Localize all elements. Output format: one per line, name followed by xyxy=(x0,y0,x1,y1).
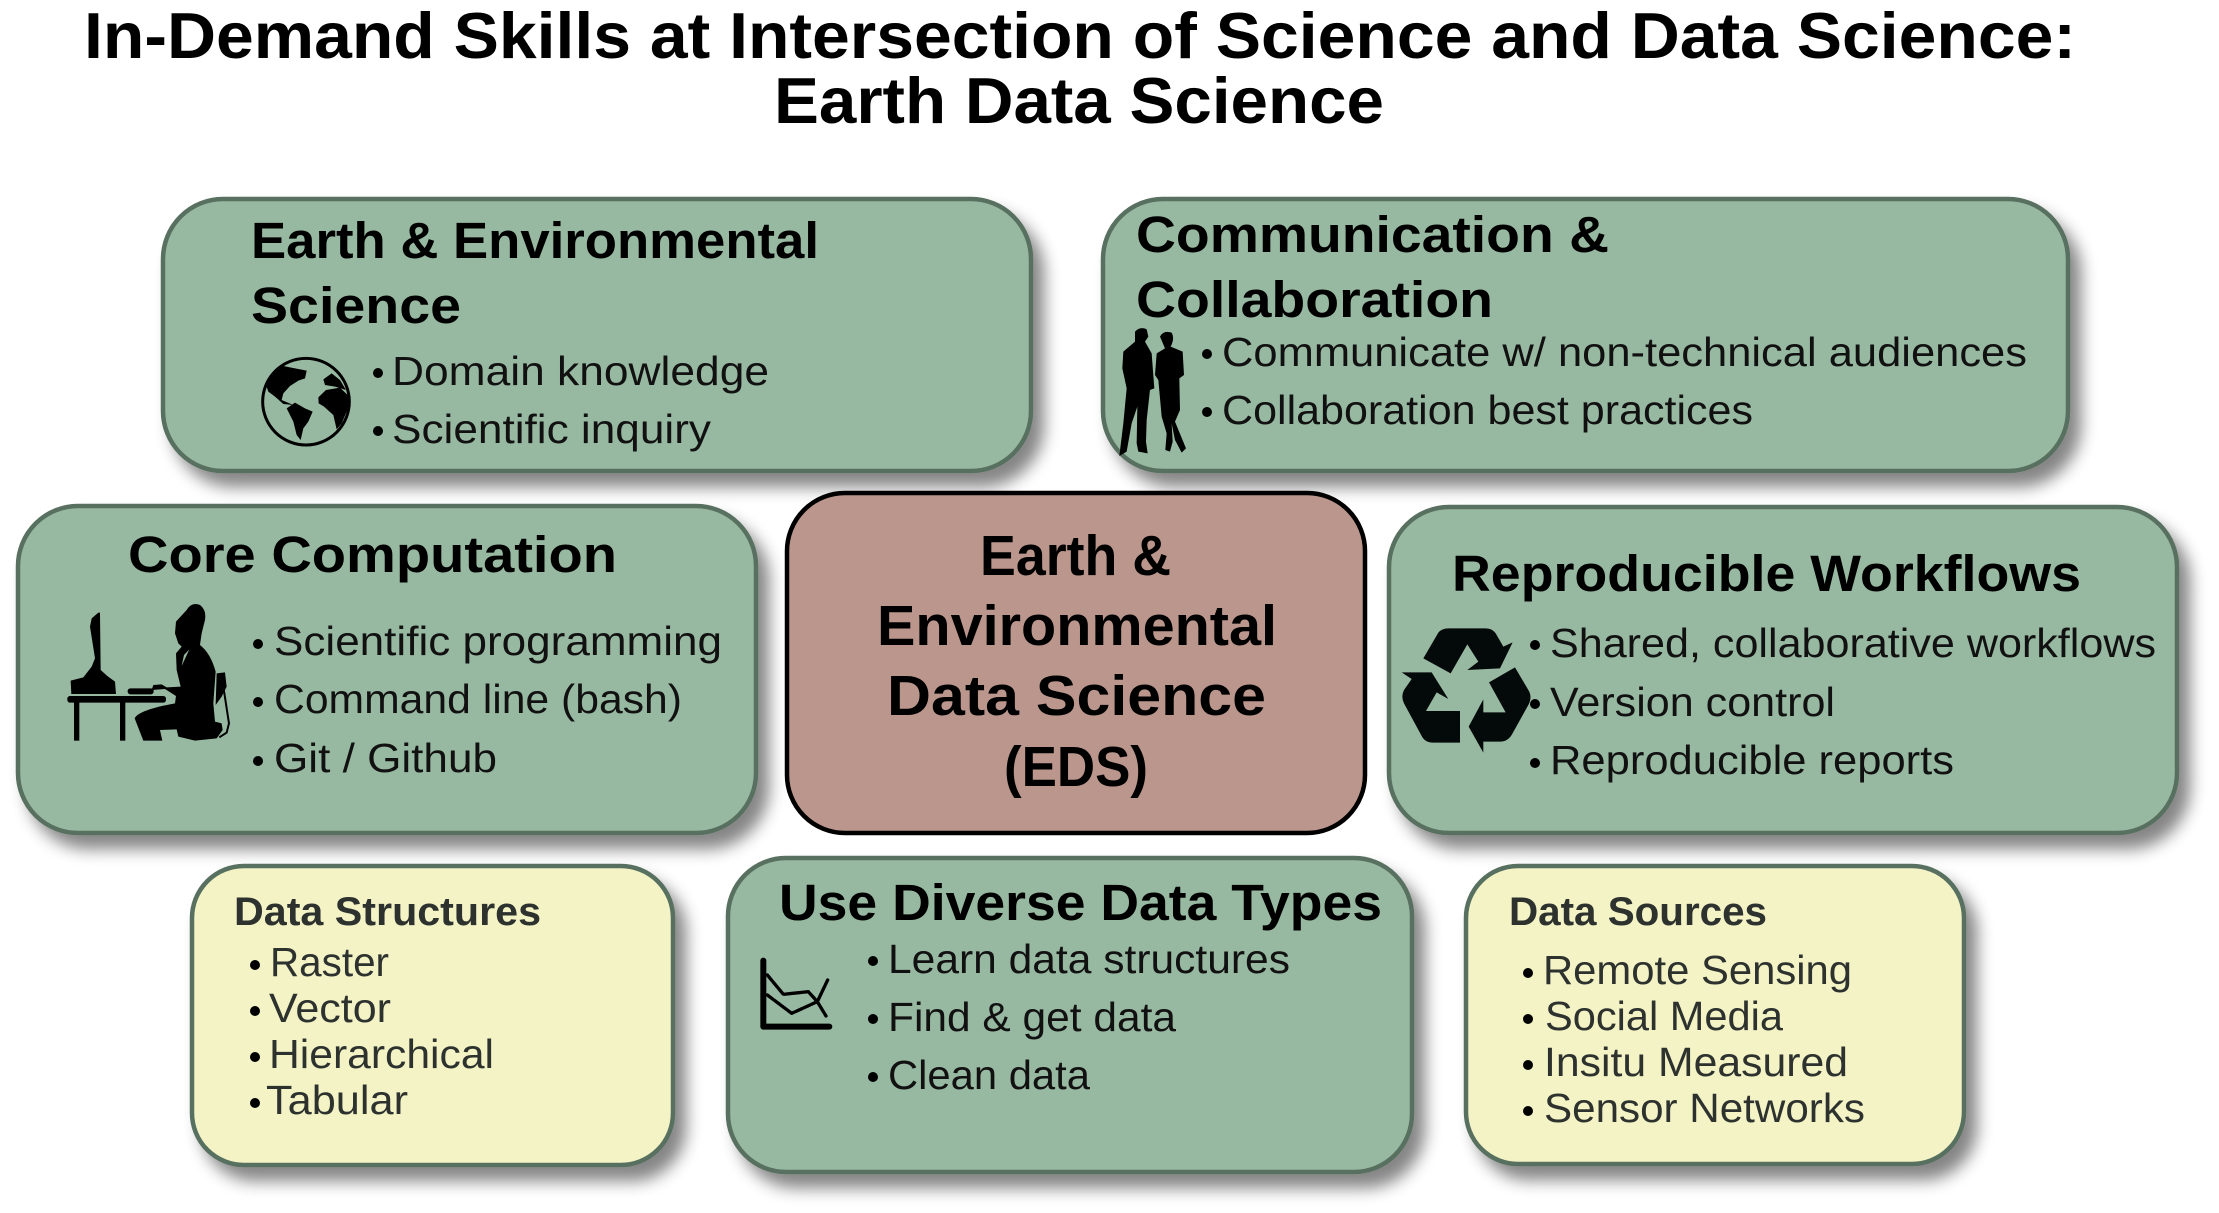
center heading: (EDS) xyxy=(1004,735,1148,799)
icon: line chart xyxy=(763,961,829,1027)
icon: recycling arrows xyxy=(1402,628,1530,753)
bullet list: data type skills: Find & get data xyxy=(888,994,1176,1040)
heading: Earth & Environmental Science: Science xyxy=(251,277,461,334)
panel: Core Computation xyxy=(18,506,756,833)
icon: globe xyxy=(263,358,349,445)
bullet list: Domain knowledge, Scientific inquiry xyxy=(373,348,769,452)
panel: Earth & Environmental Science xyxy=(163,199,1031,471)
bullet list: computation items: Scientific programming xyxy=(274,618,722,664)
list: data structure types: Hierarchical xyxy=(269,1031,494,1077)
title: Earth Data Science xyxy=(774,64,1384,137)
list: data structure types: Vector xyxy=(269,985,391,1031)
heading: Core Computation: Core Computation xyxy=(128,526,617,583)
heading: Earth & Environmental Science: Earth & Environmental xyxy=(251,212,819,269)
heading: Communication & Collaboration: Collaboration xyxy=(1136,271,1493,328)
bullet list: workflow items: Shared, collaborative workflows xyxy=(1550,620,2156,666)
list: data structure types: Raster xyxy=(270,939,389,985)
bullet list: workflow items xyxy=(1530,620,2156,783)
bullet list: Domain knowledge, Scientific inquiry: Domain knowledge xyxy=(392,348,769,394)
heading: Use Diverse Data Types: Use Diverse Data Types xyxy=(779,874,1382,931)
center heading xyxy=(877,524,1277,799)
list: data source types: Remote Sensing xyxy=(1543,947,1852,993)
bullet list: communication items xyxy=(1202,329,2027,433)
panel: Data Structures xyxy=(192,866,673,1165)
bullet list: computation items: Git / Github xyxy=(274,735,497,781)
heading: Data Structures: Data Structures xyxy=(234,890,541,934)
bullet list: computation items xyxy=(253,618,722,781)
center heading: Data Science xyxy=(887,664,1266,728)
bullet list: workflow items: Reproducible reports xyxy=(1550,737,1954,783)
list: data source types: Insitu Measured xyxy=(1544,1039,1848,1085)
heading: Data Sources: Data Sources xyxy=(1509,890,1767,934)
panel: Earth & Environmental Data Science (EDS) xyxy=(787,493,1365,833)
bullet list: communication items: Collaboration best practices xyxy=(1222,387,1753,433)
panel: Data Sources xyxy=(1466,866,1964,1164)
panel: Use Diverse Data Types xyxy=(728,858,1412,1172)
bullet list: data type skills: Clean data xyxy=(888,1052,1090,1098)
heading: Earth & Environmental Science xyxy=(251,212,819,334)
icon: person at computer xyxy=(67,604,229,741)
title xyxy=(84,0,2076,137)
list: data source types: Sensor Networks xyxy=(1544,1085,1865,1131)
heading: Reproducible Workflows: Reproducible Workflows xyxy=(1452,545,2081,602)
bullet list: data type skills xyxy=(868,936,1290,1098)
bullet list: communication items: Communicate w/ non-technical audiences xyxy=(1222,329,2027,375)
list: data source types xyxy=(1523,947,1865,1131)
title: In-Demand Skills at Intersection of Science and Data Science: xyxy=(84,0,2076,72)
icon: two people silhouettes xyxy=(1119,328,1186,456)
panel: Reproducible Workflows xyxy=(1389,507,2177,833)
bullet list: computation items: Command line (bash) xyxy=(274,676,682,722)
list: data source types: Social Media xyxy=(1545,993,1783,1039)
bullet list: data type skills: Learn data structures xyxy=(888,936,1290,982)
center heading: Environmental xyxy=(877,594,1277,658)
panel: Communication & Collaboration xyxy=(1103,199,2068,471)
heading: Communication & Collaboration xyxy=(1136,206,1609,328)
center heading: Earth & xyxy=(980,524,1171,588)
list: data structure types: Tabular xyxy=(266,1077,408,1123)
bullet list: Domain knowledge, Scientific inquiry: Scientific inquiry xyxy=(392,406,712,452)
heading: Communication & Collaboration: Communication & xyxy=(1136,206,1609,263)
list: data structure types xyxy=(250,939,494,1123)
bullet list: workflow items: Version control xyxy=(1550,679,1835,725)
